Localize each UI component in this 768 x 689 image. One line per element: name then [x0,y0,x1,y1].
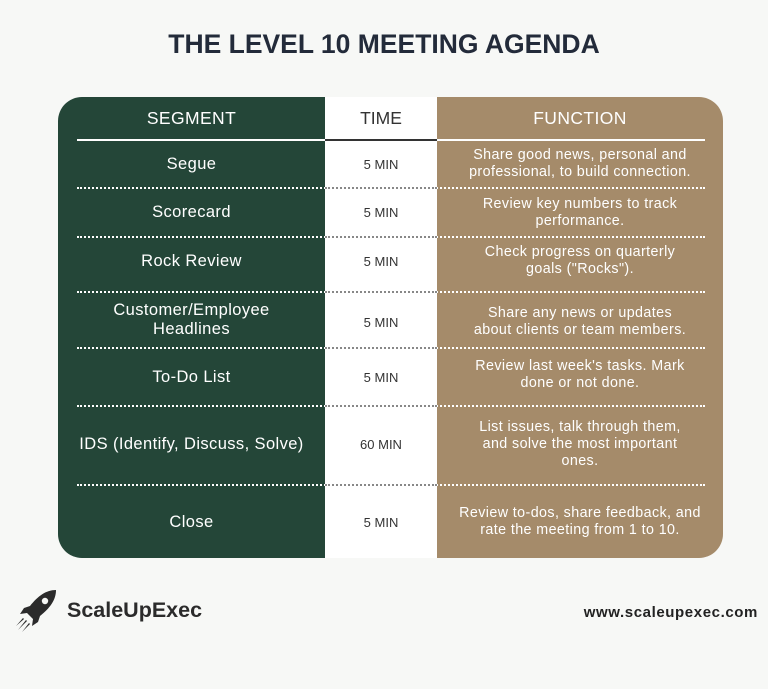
row: IDS: and solve the most important [483,436,677,452]
table [58,97,723,558]
row: headlines [113,301,686,338]
url: www.scaleupexec.com [584,604,758,621]
column: segment [58,97,325,558]
row: scorecard [152,196,677,228]
row: IDS: List issues, talk through them, [479,418,681,434]
row: IDS: IDS (Identify, Discuss, Solve) [79,434,304,452]
row: close: 5 MIN [364,514,398,530]
row: rock review [141,244,675,277]
row: rock review: goals ("Rocks"). [526,261,634,277]
row: to-do [152,358,685,391]
row: to-do: 5 MIN [364,370,398,384]
header row: FUNCTION [533,108,627,128]
row: headlines: 5 MIN [364,314,398,330]
row separators [77,187,705,189]
header row [147,108,627,128]
row: to-do: Review last week's tasks. Mark [475,358,685,374]
header row: SEGMENT [147,108,236,128]
row: segue: Segue [167,154,216,172]
row: rock review: Rock Review [141,252,242,270]
row: segue [167,147,691,180]
icon: rocket [16,590,56,632]
row: segue: professional, to build connection. [469,164,691,180]
title: THE LEVEL 10 MEETING AGENDA [168,29,600,59]
row: scorecard: Scorecard [152,203,231,221]
row: close: rate the meeting from 1 to 10. [480,522,680,538]
row: IDS [79,418,681,468]
row: IDS: ones. [562,452,598,468]
row: segue: Share good news, personal and [473,147,687,163]
row: headlines: Headlines [153,320,230,338]
row: scorecard: performance. [535,212,625,228]
header row: TIME [360,108,402,128]
row: close [169,505,701,538]
row: rock review: 5 MIN [364,254,398,268]
row: to-do: To-Do List [152,368,231,386]
row: scorecard: 5 MIN [364,205,398,220]
row: segue: 5 MIN [364,156,398,172]
row: close: Close [169,512,214,530]
column: function [437,97,723,558]
row: headlines: Share any news or updates [488,305,672,321]
row: scorecard: Review key numbers to track [483,196,677,212]
row: IDS: 60 MIN [360,436,402,452]
header lines [77,139,325,141]
row: close: Review to-dos, share feedback, and [459,505,701,521]
row: rock review: Check progress on quarterly [485,244,675,260]
column: time [325,97,437,558]
row: headlines: Customer/Employee [113,301,270,319]
logo [16,590,202,632]
row: headlines: about clients or team members. [474,322,686,338]
brand name: ScaleUpExec [67,598,202,622]
row: to-do: done or not done. [521,375,639,391]
